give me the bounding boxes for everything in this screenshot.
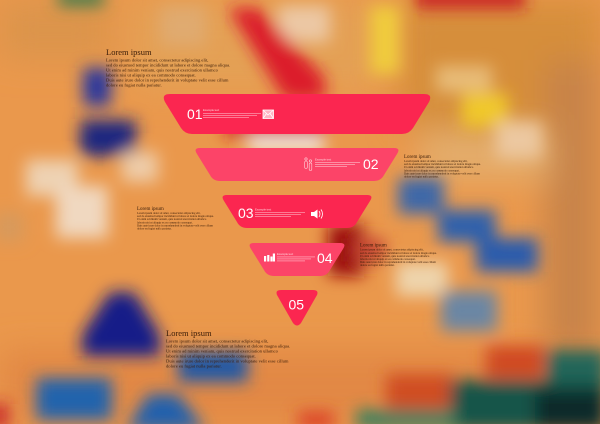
text block: right of 02: Lorem ipsum — [404, 155, 431, 160]
text block: top left: Ut enim ad minim veniam, quis nostrud exercitation ullamco — [106, 68, 219, 74]
text block: right of 04: Lorem ipsum — [360, 244, 387, 249]
icon: speaker — [311, 210, 322, 218]
text block: right of 02: Lorem ipsum dolor sit amet, consectetur adipiscing elit, — [404, 159, 468, 163]
text block: left of 03: Duis aute irure dolor in reprehenderit in voluptate velit esse cillum — [137, 223, 214, 227]
funnel segment 03: Example text — [255, 208, 271, 212]
funnel segment 02: 02 — [363, 156, 379, 172]
text block: left of 03: laboris nisi ut aliquip ex ea commodo consequat. — [137, 220, 193, 224]
funnel segment 01: 01 — [187, 106, 203, 122]
text block: right of 02: sed do eiusmod tempor incididunt ut labore et dolore magna aliqua. — [404, 162, 481, 166]
text block: right of 02: dolore eu fugiat nulla pariatur. — [404, 174, 439, 178]
text block: bottom: Lorem ipsum — [166, 328, 212, 338]
funnel segment 03 — [223, 195, 371, 228]
text block: left of 03: Lorem ipsum dolor sit amet, consectetur adipiscing elit, — [137, 211, 201, 215]
text block: top left: Duis aute irure dolor in reprehenderit in voluptate velit esse cillum — [106, 78, 229, 82]
text block: top left: Lorem ipsum — [106, 47, 152, 57]
icon: bar chart — [264, 254, 275, 262]
text block: right of 04: Ut enim ad minim veniam, quis nostrud exercitation ullamco — [360, 254, 430, 258]
text block: right of 04: dolore eu fugiat nulla pariatur. — [360, 263, 395, 267]
text block: left of 03: dolore eu fugiat nulla pariatur. — [137, 226, 172, 230]
text block: top left — [106, 47, 230, 88]
funnel segment 01 — [164, 94, 430, 134]
funnel segment 02: Example text — [315, 158, 331, 162]
text block: bottom: Ut enim ad minim veniam, quis nostrud exercitation ullamco — [166, 348, 279, 354]
funnel segment 03: 03 — [238, 205, 254, 221]
text block: top left: dolore eu fugiat nulla pariatur. — [106, 82, 162, 88]
text block: right of 04 — [360, 244, 437, 267]
funnel segment 04 — [250, 243, 344, 276]
text block: right of 02: laboris nisi ut aliquip ex ea commodo consequat. — [404, 168, 460, 172]
text block: left of 03: Lorem ipsum — [137, 207, 164, 212]
text block: right of 02 — [404, 155, 481, 178]
funnel segment 04: Example text — [277, 252, 293, 256]
funnel segment 01: Example text — [203, 108, 219, 112]
text block: left of 03: Ut enim ad minim veniam, quis nostrud exercitation ullamco — [137, 217, 207, 221]
text block: bottom: laboris nisi ut aliquip ex ea commodo consequat. — [166, 354, 256, 358]
text block: bottom: Duis aute irure dolor in reprehenderit in voluptate velit esse cillum — [166, 358, 289, 364]
text block: right of 04: Duis aute irure dolor in reprehenderit in voluptate velit esse cillum — [360, 260, 437, 264]
icon: people — [305, 158, 312, 170]
text block: right of 02: Ut enim ad minim veniam, quis nostrud exercitation ullamco — [404, 165, 474, 169]
text block: left of 03 — [137, 207, 214, 230]
text block: left of 03: sed do eiusmod tempor incididunt ut labore et dolore magna aliqua. — [137, 214, 214, 218]
funnel segment 04: 04 — [317, 250, 333, 266]
text block: top left: Lorem ipsum dolor sit amet, consectetur adipiscing elit, — [106, 58, 208, 64]
text block: right of 04: sed do eiusmod tempor incididunt ut labore et dolore magna aliqua. — [360, 251, 437, 255]
text block: bottom — [166, 328, 290, 368]
text block: bottom: dolore eu fugiat nulla pariatur. — [166, 364, 222, 368]
funnel segment 02 — [196, 148, 398, 181]
funnel segment 05: 05 — [288, 296, 304, 312]
text block: top left: sed do eiusmod tempor incididunt ut labore et dolore magna aliqua. — [106, 62, 230, 68]
text block: right of 04: laboris nisi ut aliquip ex ea commodo consequat. — [360, 257, 416, 261]
text block: bottom: sed do eiusmod tempor incididunt ut labore et dolore magna aliqua. — [166, 344, 290, 348]
text block: bottom: Lorem ipsum dolor sit amet, consectetur adipiscing elit, — [166, 338, 268, 344]
funnel segment 05 — [276, 290, 318, 326]
text block: right of 02: Duis aute irure dolor in reprehenderit in voluptate velit esse cillum — [404, 171, 481, 175]
text block: top left: laboris nisi ut aliquip ex ea commodo consequat. — [106, 72, 196, 78]
text block: right of 04: Lorem ipsum dolor sit amet, consectetur adipiscing elit, — [360, 248, 424, 252]
icon: envelope — [263, 110, 274, 118]
